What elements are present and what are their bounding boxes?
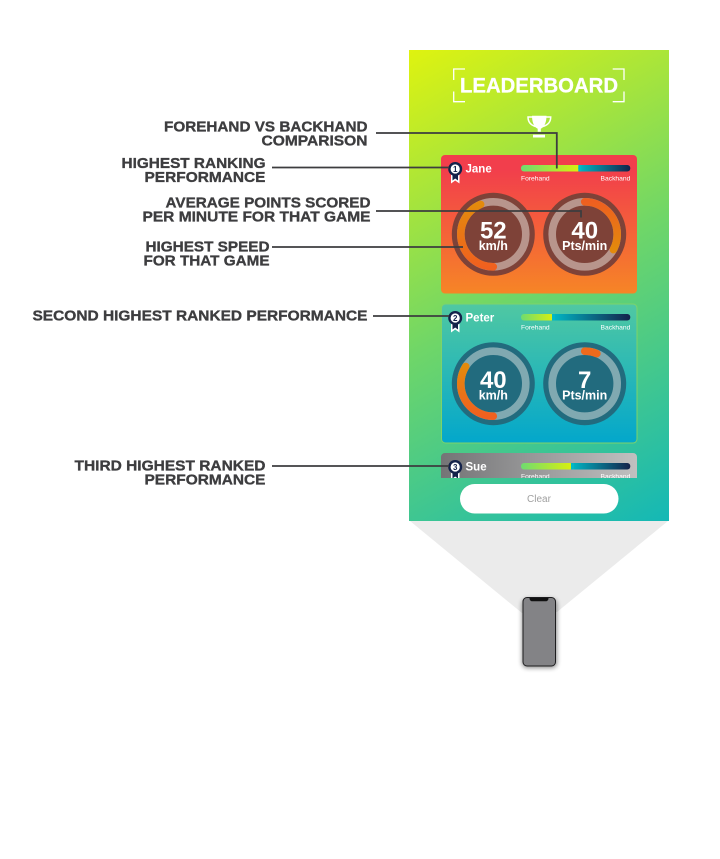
forehand vs backhand bar: Forehand bbox=[521, 324, 550, 332]
points per minute gauge bbox=[543, 193, 626, 276]
icon: rank 2 badge: 2 bbox=[453, 314, 458, 323]
callout: average points: PER MINUTE FOR THAT GAME bbox=[142, 208, 370, 226]
leaderboard screen panel bbox=[409, 50, 669, 521]
player name: Sue bbox=[466, 462, 487, 474]
callout: third highest bbox=[74, 458, 449, 488]
forehand vs backhand bar bbox=[521, 165, 631, 182]
callout: average points bbox=[142, 194, 581, 226]
points per minute gauge: Pts/min bbox=[562, 388, 607, 402]
icon: trophy bbox=[528, 116, 551, 138]
title bracket frame bbox=[454, 69, 624, 102]
callout: third highest: PERFORMANCE bbox=[144, 472, 266, 488]
callout: forehand vs backhand bbox=[164, 118, 557, 168]
title: LEADERBOARD bbox=[460, 74, 618, 98]
points per minute gauge: 40 bbox=[571, 218, 598, 244]
icon: rank 1 badge bbox=[448, 162, 462, 184]
icon: smartphone bbox=[522, 598, 557, 668]
points per minute gauge: Pts/min bbox=[562, 239, 607, 253]
card: Peter bbox=[442, 304, 637, 443]
projection funnel bbox=[410, 521, 668, 613]
callout: average points: AVERAGE POINTS SCORED bbox=[166, 194, 371, 212]
points per minute gauge: 7 bbox=[578, 367, 591, 394]
speed gauge: km/h bbox=[479, 388, 508, 402]
icon: rank 1 badge: 1 bbox=[453, 165, 458, 174]
callout: highest ranking: HIGHEST RANKING bbox=[122, 155, 266, 172]
speed gauge bbox=[452, 193, 535, 276]
card: Jane bbox=[441, 155, 637, 294]
callout: highest ranking bbox=[122, 155, 449, 186]
speed gauge: km/h bbox=[479, 239, 508, 253]
forehand vs backhand bar: Backhand bbox=[601, 176, 631, 182]
forehand vs backhand bar bbox=[521, 463, 630, 478]
forehand vs backhand bar: Backhand bbox=[601, 324, 631, 332]
icon: rank 3 badge: 3 bbox=[453, 463, 458, 472]
callout: highest speed bbox=[144, 238, 463, 270]
callout: forehand vs backhand: FOREHAND VS BACKHAND bbox=[164, 118, 368, 136]
speed gauge bbox=[452, 342, 535, 425]
points per minute gauge bbox=[543, 342, 626, 425]
callout: third highest: THIRD HIGHEST RANKED bbox=[74, 458, 266, 474]
speed gauge: 52 bbox=[480, 218, 507, 244]
callout: highest ranking: PERFORMANCE bbox=[144, 169, 266, 186]
speed gauge: 40 bbox=[480, 367, 507, 394]
player name: Jane bbox=[466, 164, 492, 176]
forehand vs backhand bar bbox=[521, 314, 631, 332]
clear button bbox=[460, 484, 618, 514]
forehand vs backhand bar: Forehand bbox=[521, 474, 550, 480]
icon: rank 2 badge bbox=[448, 311, 462, 332]
forehand vs backhand bar: Backhand bbox=[601, 474, 631, 480]
icon: rank 3 badge bbox=[448, 460, 462, 478]
forehand vs backhand bar: Forehand bbox=[521, 176, 550, 182]
callout: second highest: SECOND HIGHEST RANKED PERFORMANCE bbox=[32, 308, 368, 324]
card: Sue (clipped) bbox=[441, 453, 637, 478]
callout: forehand vs backhand: COMPARISON bbox=[262, 132, 368, 150]
player name: Peter bbox=[466, 312, 495, 324]
callout: highest speed: FOR THAT GAME bbox=[144, 252, 270, 270]
clear button: Clear bbox=[527, 494, 552, 505]
callout: highest speed: HIGHEST SPEED bbox=[146, 238, 270, 256]
